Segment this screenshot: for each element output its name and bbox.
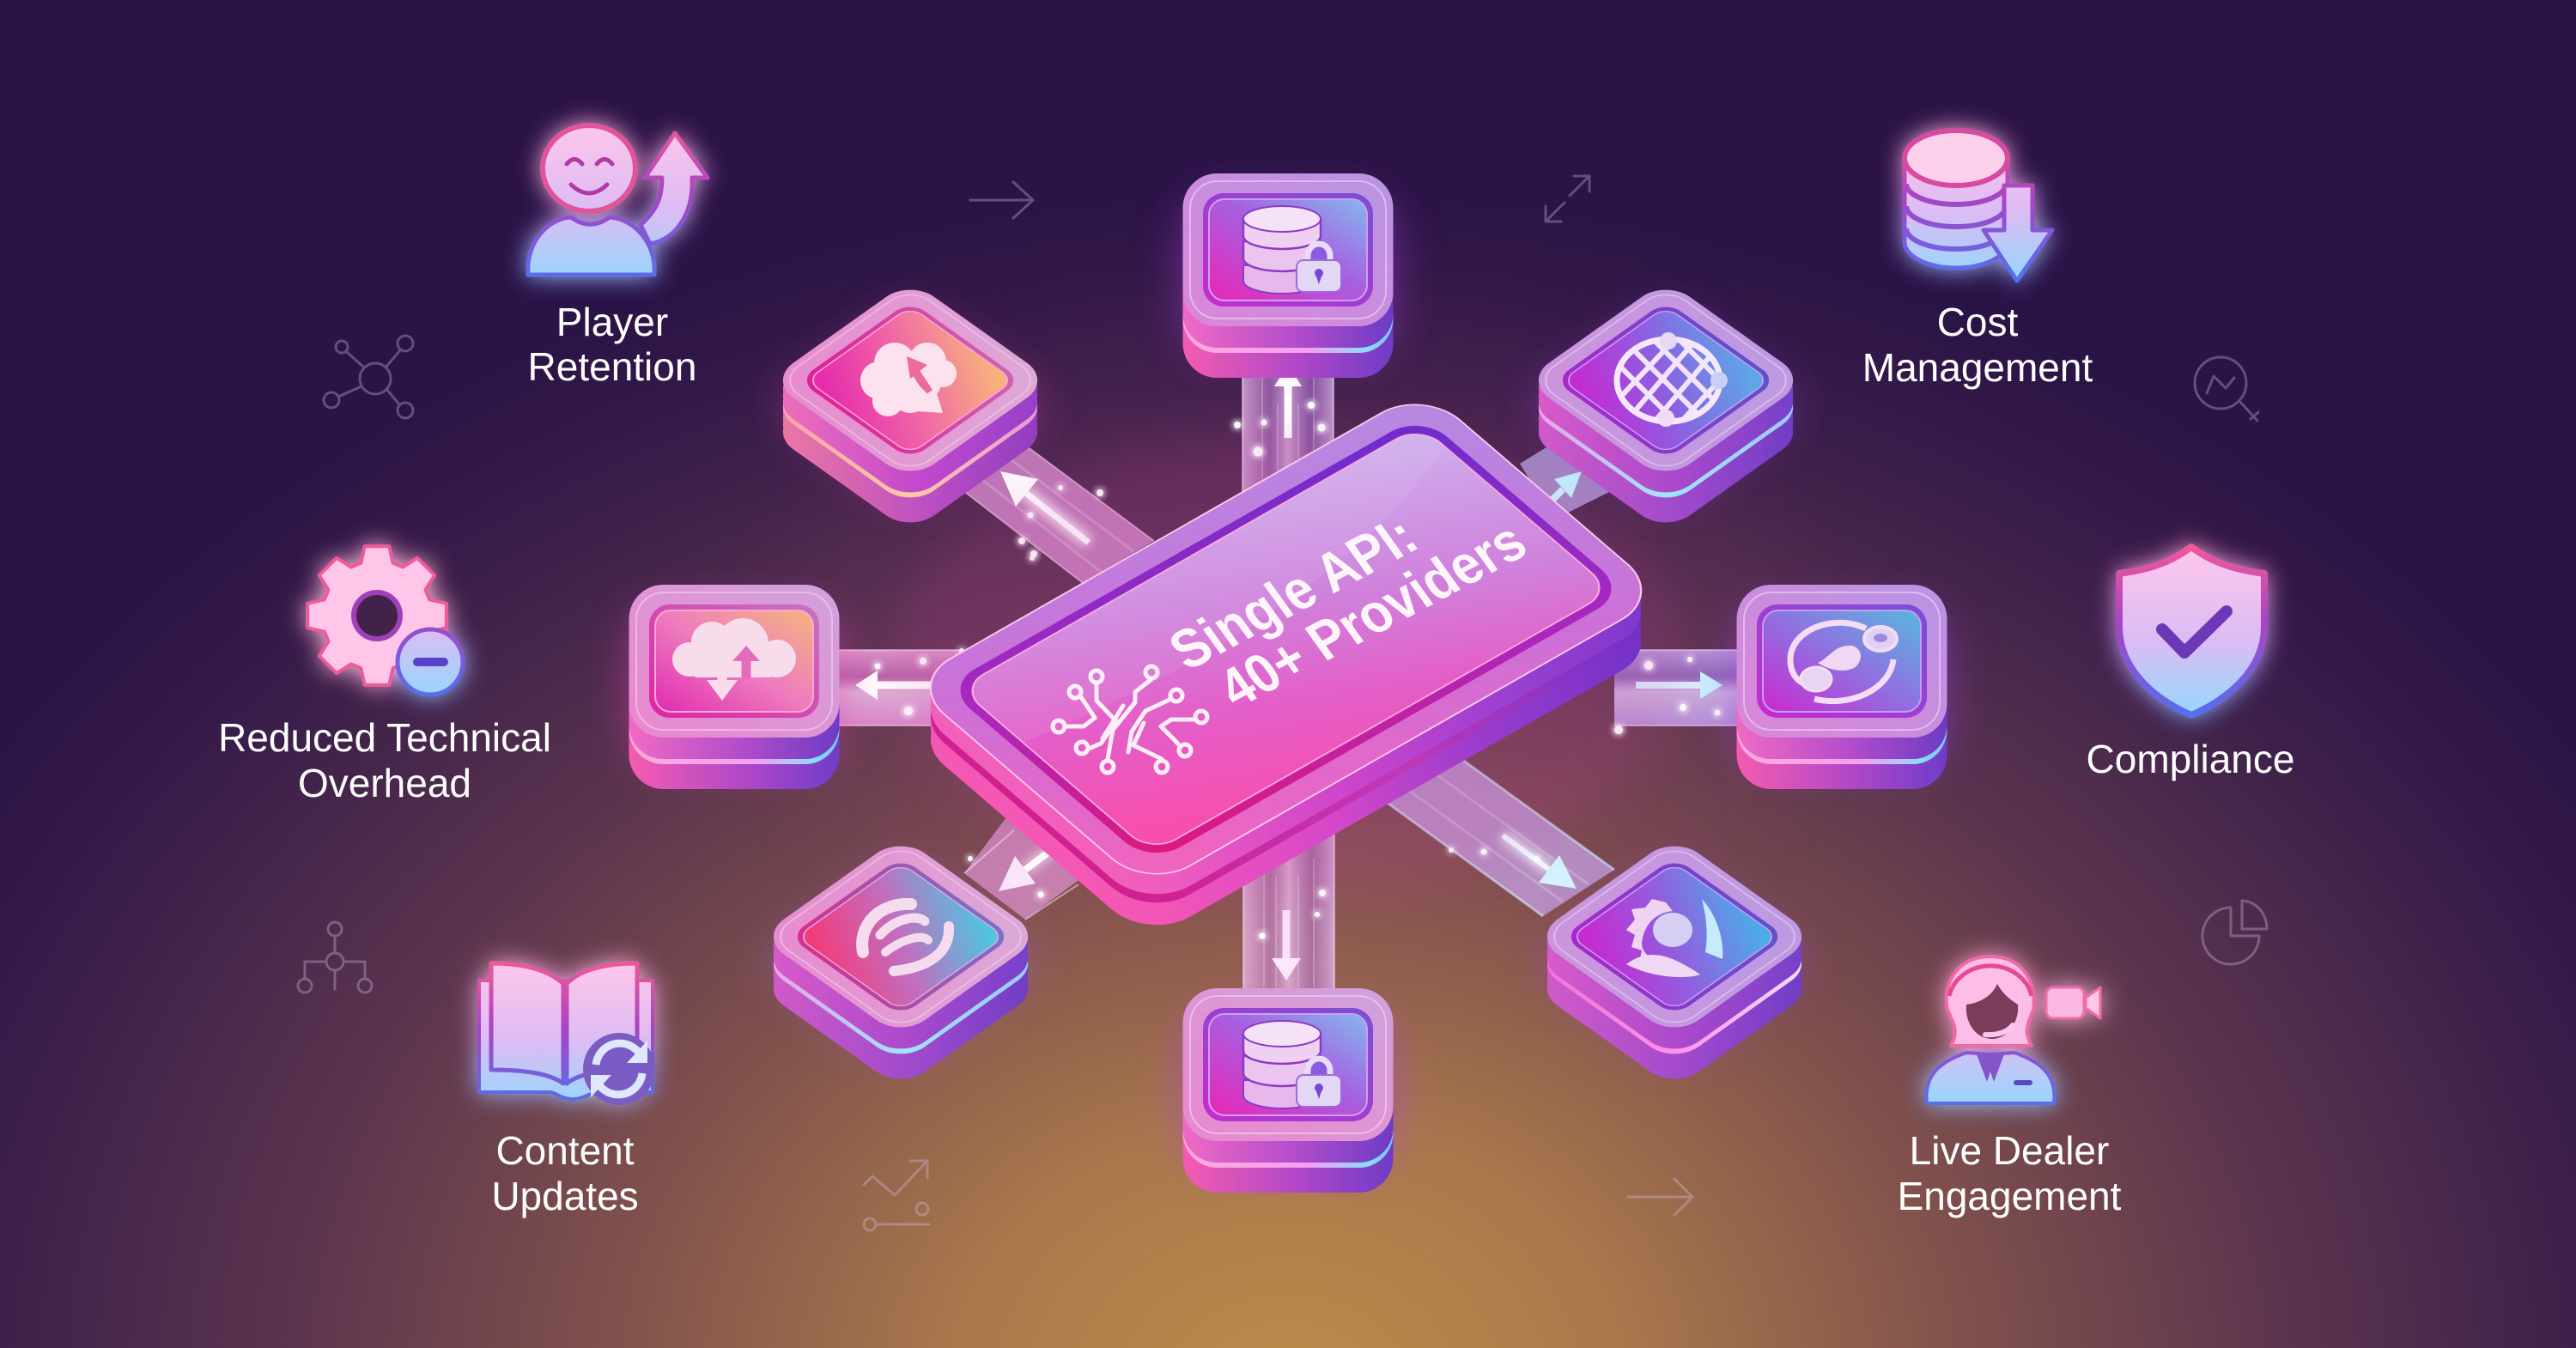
beam: upper left xyxy=(955,441,1154,583)
beam: left xyxy=(833,650,962,726)
tile: lower right gear person xyxy=(1533,836,1816,1089)
platform title line 1: Single API: xyxy=(1157,505,1429,682)
benefit: Content Updates xyxy=(479,963,655,1218)
beam: lower right xyxy=(1379,755,1614,916)
faint decorative icons xyxy=(298,176,2267,1230)
platform lower layers xyxy=(908,398,1664,941)
icon: cloud with arrows xyxy=(860,343,957,416)
decorative arrow bottom xyxy=(1628,1179,1692,1215)
label: Overhead xyxy=(298,761,471,805)
icon: smiling player with up arrow xyxy=(528,125,708,275)
icon: database with lock xyxy=(1243,206,1341,294)
label: Management xyxy=(1862,345,2093,390)
platform title line 2: 40+ Providers xyxy=(1206,511,1538,720)
decorative trend xyxy=(864,1161,929,1230)
label: Cost xyxy=(1937,300,2019,344)
icon: dealer with headset and camera xyxy=(1927,956,2100,1103)
benefit: Reduced Technical Overhead xyxy=(218,546,551,805)
tile: upper left cloud xyxy=(769,280,1052,532)
beam: upper right xyxy=(1520,429,1631,519)
icon: cloud up and down xyxy=(672,618,796,701)
platform top surface xyxy=(908,389,1664,890)
decorative network xyxy=(324,336,413,418)
tile: upper right globe xyxy=(1524,280,1807,532)
decorative expand arrows xyxy=(1546,176,1589,222)
beam: bottom xyxy=(1243,824,1334,992)
tile: bottom database lock xyxy=(1183,988,1393,1193)
label: Engagement xyxy=(1898,1174,2122,1218)
tile: lower left swirl xyxy=(759,836,1042,1089)
label: Live Dealer xyxy=(1910,1128,2109,1173)
tile: right orbit xyxy=(1736,585,1947,789)
icon: shield with check xyxy=(2119,547,2264,715)
decorative arrow top xyxy=(970,182,1033,218)
benefit: Live Dealer Engagement xyxy=(1898,956,2122,1218)
label: Compliance xyxy=(2087,737,2294,781)
label: Retention xyxy=(528,344,696,389)
connector beams xyxy=(833,326,1743,992)
beam: right xyxy=(1614,650,1743,726)
beam: lower left xyxy=(964,807,1108,920)
tile: top database lock xyxy=(1183,173,1393,378)
benefit: Cost Management xyxy=(1862,131,2093,390)
decorative hierarchy xyxy=(298,922,372,993)
icon: circuit chip xyxy=(1053,666,1207,773)
icon: swirl xyxy=(862,904,949,971)
label: Updates xyxy=(491,1174,639,1218)
benefit: Player Retention xyxy=(528,125,708,389)
center platform: Single API xyxy=(893,389,1683,941)
icon: coin stack with down arrow xyxy=(1905,131,2052,281)
beam: top xyxy=(1242,326,1334,507)
icon: gear and person xyxy=(1626,899,1722,977)
label: Reduced Technical xyxy=(218,715,551,760)
label: Player xyxy=(556,300,668,344)
decorative pie xyxy=(2202,901,2267,964)
label: Content xyxy=(495,1128,635,1173)
sparkle particles xyxy=(874,368,1721,939)
decorative magnifier xyxy=(2195,357,2258,421)
icon: orbit ring xyxy=(1790,622,1897,701)
icon: globe with nodes xyxy=(1614,332,1728,427)
benefit: Compliance xyxy=(2087,547,2294,781)
icon: gear with minus badge xyxy=(307,546,463,695)
tile: left cloud xyxy=(629,585,840,789)
icon: database with lock xyxy=(1243,1021,1341,1108)
icon: open book with refresh xyxy=(479,963,655,1105)
